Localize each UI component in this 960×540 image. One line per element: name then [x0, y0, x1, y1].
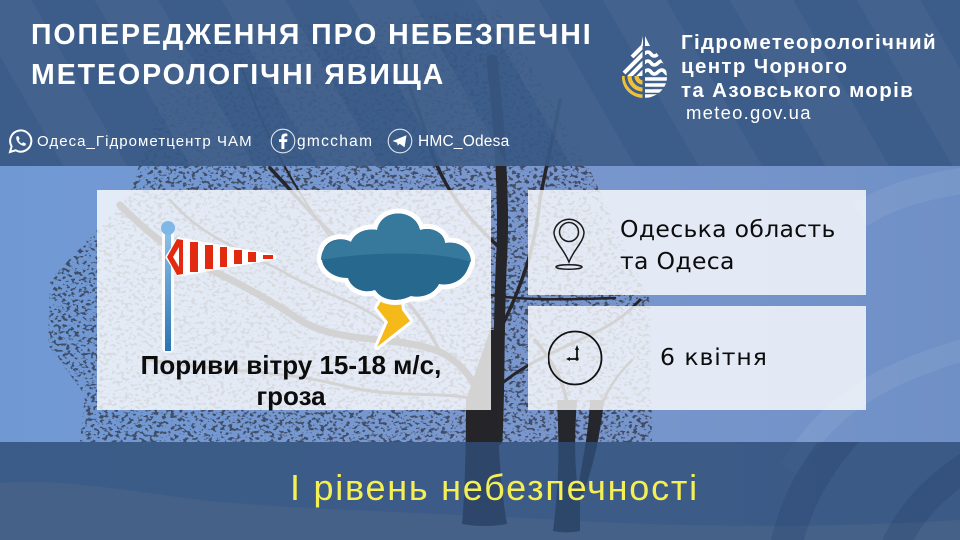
decorative arcs	[771, 454, 926, 540]
icon: whatsapp	[8, 129, 32, 154]
whatsapp label: Одеса_Гідрометцентр ЧАМ	[37, 133, 253, 150]
organization name: центр Чорного	[681, 55, 848, 78]
date text: 6 квітня	[660, 343, 768, 371]
facebook label: gmccham	[297, 133, 373, 150]
logo: striped water drop	[622, 36, 667, 98]
icon: map pin	[553, 218, 585, 270]
hazard text: Пориви вітру 15-18 м/с,	[141, 350, 441, 380]
region text: Одеська область	[620, 215, 836, 243]
icon: storm cloud with lightning	[316, 208, 475, 350]
header band	[0, 0, 960, 166]
hazard text	[141, 350, 441, 411]
icon: clock	[548, 330, 602, 386]
panel: region	[528, 190, 866, 295]
icon: wind sock	[161, 221, 276, 353]
title: МЕТЕОРОЛОГІЧНІ ЯВИЩА	[31, 59, 445, 91]
organization name: Гідрометеорологічний	[681, 31, 937, 54]
hazard text: гроза	[256, 381, 326, 411]
organization name	[681, 31, 937, 102]
danger level: І рівень небезпечності	[290, 467, 699, 508]
panel: date	[528, 306, 866, 410]
region text: та Одеса	[620, 247, 735, 275]
organization name: та Азовського морів	[681, 79, 914, 102]
telegram label: НМС_Odesa	[418, 133, 509, 150]
icon: telegram	[388, 128, 412, 154]
footer band	[0, 442, 960, 540]
title: ПОПЕРЕДЖЕННЯ ПРО НЕБЕЗПЕЧНІ	[31, 19, 593, 51]
icon: facebook	[270, 128, 296, 154]
region text	[620, 215, 836, 275]
title	[31, 19, 593, 91]
website: meteo.gov.ua	[686, 102, 812, 123]
panel: hazards	[97, 190, 491, 410]
